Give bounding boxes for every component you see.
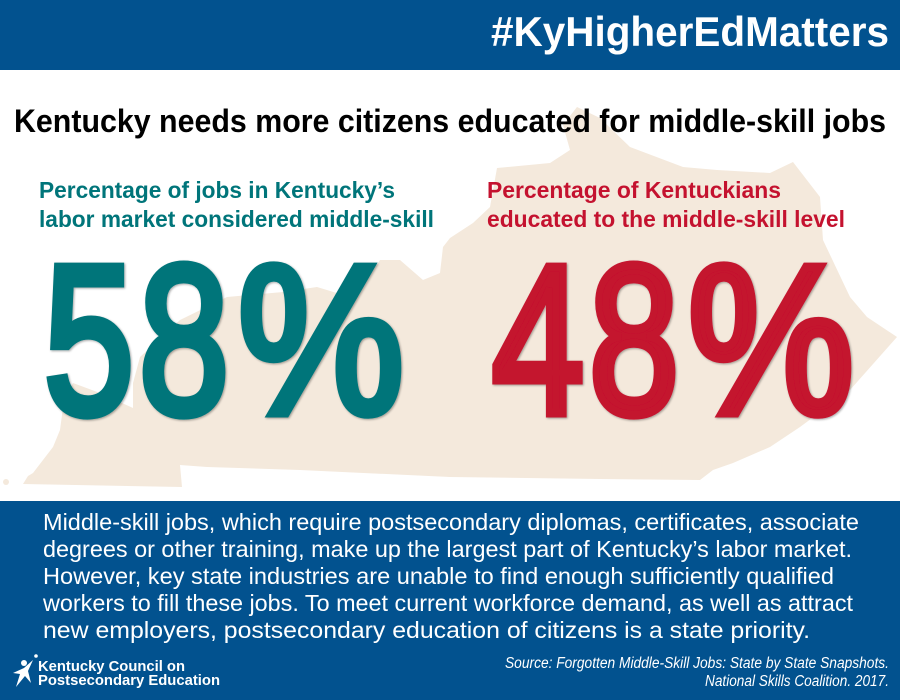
right label: educated to the middle-skill level xyxy=(487,206,845,232)
right number 48%: % xyxy=(688,221,854,458)
right number 48%: 8 xyxy=(589,221,679,458)
left stat: jobs xyxy=(39,177,434,458)
body paragraph xyxy=(42,509,859,643)
icon: star figure xyxy=(13,654,38,687)
left label: labor market considered middle-skill xyxy=(39,206,434,232)
right number 48%: 4 xyxy=(492,221,584,458)
left number 58%: 8 xyxy=(139,221,229,458)
left number 58% xyxy=(44,221,404,458)
left number 58%: % xyxy=(238,221,404,458)
body paragraph: degrees or other training, make up the largest part of Kentucky’s labor market. xyxy=(43,536,852,562)
header band xyxy=(0,0,900,70)
left label xyxy=(39,177,434,232)
right stat: education xyxy=(487,177,854,458)
left number 58%: 5 xyxy=(44,221,134,458)
footer band xyxy=(0,501,900,700)
body paragraph: workers to fill these jobs. To meet current workforce demand, as well as attract xyxy=(42,590,854,616)
logo wordmark xyxy=(38,659,220,689)
body paragraph: Middle-skill jobs, which require postsecondary diplomas, certificates, associate xyxy=(43,509,859,535)
right label: Percentage of Kentuckians xyxy=(487,177,781,203)
logo xyxy=(13,654,220,689)
map: Kentucky outline xyxy=(3,107,897,487)
left label: Percentage of jobs in Kentucky’s xyxy=(39,177,395,203)
right number 48% xyxy=(492,221,854,458)
logo wordmark: Postsecondary Education xyxy=(38,673,220,689)
body paragraph: new employers, postsecondary education of citizens is a state priority. xyxy=(43,617,810,643)
logo wordmark: Kentucky Council on xyxy=(38,659,185,675)
body paragraph: However, key state industries are unable to find enough sufficiently qualified xyxy=(43,563,834,589)
right label xyxy=(487,177,845,232)
source citation xyxy=(505,655,889,690)
hashtag: #KyHigherEdMatters xyxy=(491,8,889,55)
